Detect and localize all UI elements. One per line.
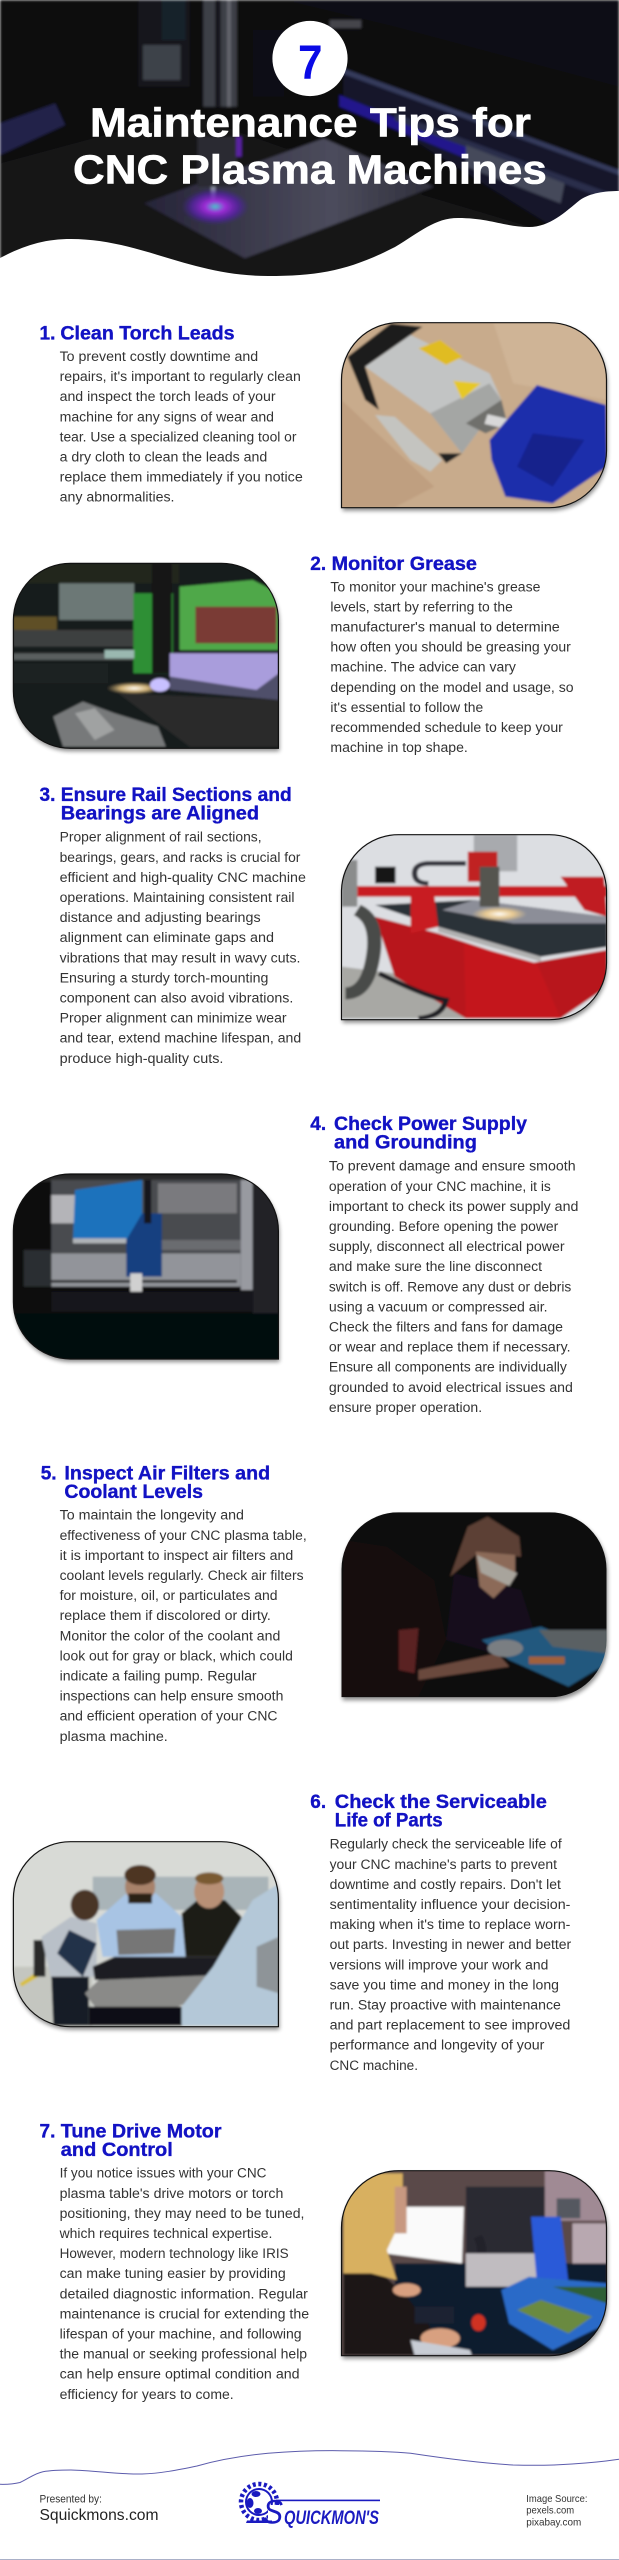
body text 4: To prevent damage and ensure smooth — [329, 1159, 576, 1174]
body text 3 — [60, 830, 306, 1066]
heading 1: 1. — [40, 323, 55, 344]
body text 6: versions will improve your work and — [330, 1957, 548, 1972]
body text 3: Proper alignment can minimize wear — [60, 1011, 287, 1026]
body text 4: operation of your CNC machine, it is — [329, 1179, 551, 1194]
body text 4: using a vacuum or compressed air. — [329, 1299, 548, 1314]
body text 5: To maintain the longevity and — [60, 1508, 244, 1523]
heading 4: Check Power Supply — [334, 1114, 527, 1135]
body text 7: efficiency for years to come. — [60, 2387, 234, 2402]
photo: green gantry machine cutting — [8, 560, 284, 753]
body text 5: replace them if discolored or dirty. — [60, 1608, 271, 1623]
heading 4: and Grounding — [334, 1133, 477, 1154]
heading 5: 5. — [41, 1463, 57, 1484]
photo: three engineers at a laptop — [8, 1838, 284, 2032]
body text 4: ensure proper operation. — [329, 1400, 482, 1415]
body text 4: or wear and replace them if necessary. — [329, 1340, 570, 1355]
logo: Squickmon's: QUICKMON'S — [284, 2508, 379, 2529]
presented by — [40, 2494, 158, 2524]
heading 6: Check the Serviceable — [335, 1792, 547, 1813]
heading 3: Bearings are Aligned — [61, 804, 259, 825]
body text 2 — [330, 579, 574, 755]
body text 2: levels, start by referring to the — [330, 599, 513, 614]
photo: torch head and blue glove — [332, 317, 616, 517]
body text 7: can help ensure optimal condition and — [60, 2367, 300, 2382]
body text 5: for moisture, oil, or particulates and — [60, 1588, 277, 1603]
panel: tip 1 clean torch leads — [40, 317, 616, 517]
photo: red plasma table — [336, 830, 612, 1023]
body text 6: Regularly check the serviceable life of — [330, 1837, 562, 1852]
body text 4: important to check its power supply and — [329, 1199, 578, 1214]
body text 7: If you notice issues with your CNC — [60, 2166, 267, 2181]
body text 7: However, modern technology like IRIS — [60, 2246, 289, 2261]
body text 5: coolant levels regularly. Check air filters — [60, 1568, 304, 1583]
body text 6: out parts. Investing in newer and better — [330, 1937, 572, 1952]
heading 6: Life of Parts — [335, 1811, 443, 1832]
body text 6 — [330, 1837, 572, 2073]
panel: tip 7 drive motor and control — [40, 2121, 612, 2402]
panel: tip 3 rail sections and bearings — [40, 785, 612, 1066]
body text 2: it's essential to follow the — [330, 700, 483, 715]
heading 6: 6. — [310, 1792, 326, 1813]
body text 3: produce high-quality cuts. — [60, 1051, 223, 1066]
body text 4: and make sure the line disconnect — [329, 1259, 542, 1274]
body text 3: bearings, gears, and racks is crucial for — [60, 850, 301, 865]
heading 2: Monitor Grease — [332, 554, 477, 575]
title: Maintenance Tips for — [90, 100, 531, 146]
body text 4: grounded to avoid electrical issues and — [329, 1380, 573, 1395]
body text 5: effectiveness of your CNC plasma table, — [60, 1528, 307, 1543]
body text 7: maintenance is crucial for extending the — [60, 2306, 309, 2321]
body text 7: can make tuning easier by providing — [60, 2266, 286, 2281]
body text 3: alignment can eliminate gaps and — [60, 930, 274, 945]
footer — [0, 2451, 619, 2560]
body text 5: indicate a failing pump. Regular — [60, 1668, 257, 1684]
body text 1: machine for any signs of wear and — [60, 409, 274, 424]
panel: tip 6 serviceable life of parts — [8, 1792, 572, 2073]
heading 4 — [310, 1114, 527, 1154]
heading 4: 4. — [310, 1114, 326, 1135]
body text 5 — [60, 1508, 307, 1744]
body text 4 — [329, 1159, 578, 1415]
body text 4: Check the filters and fans for damage — [329, 1320, 563, 1334]
body text 5: and efficient operation of your CNC — [60, 1709, 278, 1724]
panel: tip 2 monitor grease — [8, 554, 574, 755]
body text 1: To prevent costly downtime and — [60, 349, 258, 364]
image source: Image Source: — [526, 2493, 588, 2505]
heading 3 — [40, 785, 292, 825]
body text 1: any abnormalities. — [60, 490, 174, 505]
body text 6: CNC machine. — [330, 2058, 418, 2073]
body text 6: and part replacement to see improved — [330, 2018, 570, 2033]
body text 3: component can also avoid vibrations. — [60, 990, 293, 1006]
body text 6: save you time and money in the long — [330, 1977, 559, 1992]
body text 7: plasma table's drive motors or torch — [60, 2186, 283, 2201]
body text 7: the manual or seeking professional help — [60, 2347, 307, 2362]
body text 7: detailed diagnostic information. Regular — [60, 2286, 308, 2301]
heading 5 — [41, 1463, 270, 1503]
body text 1: tear. Use a specialized cleaning tool or — [60, 429, 297, 444]
body text 2: depending on the model and usage, so — [330, 680, 574, 695]
header photo: plasma machine — [0, 0, 619, 300]
body text 2: recommended schedule to keep your — [330, 720, 563, 735]
body text 4: grounding. Before opening the power — [329, 1219, 559, 1234]
photo: technician with goggles — [336, 1508, 612, 1702]
body text 1 — [60, 349, 303, 505]
body text 7 — [59, 2166, 309, 2402]
panel: tip 4 power supply and grounding — [8, 1114, 578, 1415]
body text 2: manufacturer's manual to determine — [330, 620, 560, 634]
badge: number 7 — [272, 21, 348, 96]
image source: pexels.com — [526, 2505, 574, 2517]
image source: pixabay.com — [526, 2516, 582, 2528]
body text 4: supply, disconnect all electrical power — [329, 1239, 565, 1254]
body text 3: vibrations that may result in wavy cuts. — [60, 950, 300, 965]
body text 6: making when it's time to replace worn- — [330, 1917, 570, 1932]
heading 2: 2. — [310, 554, 326, 575]
image source — [526, 2493, 588, 2528]
panel: tip 5 air filters and coolant — [41, 1463, 612, 1744]
body text 2: how often you should be greasing your — [330, 640, 571, 655]
heading 3: Ensure Rail Sections and — [61, 785, 292, 806]
body text 3: operations. Maintaining consistent rail — [60, 890, 295, 905]
title — [73, 100, 547, 193]
presented by: Squickmons.com — [40, 2507, 158, 2524]
body text 1: replace them immediately if you notice — [60, 470, 303, 485]
heading 7 — [40, 2121, 222, 2161]
body text 6: run. Stay proactive with maintenance — [330, 1998, 561, 2012]
body text 7: lifespan of your machine, and following — [60, 2326, 302, 2342]
body text 3: and tear, extend machine lifespan, and — [60, 1031, 301, 1046]
body text 6: sentimentality influence your decision- — [330, 1897, 570, 1912]
heading 7: and Control — [61, 2140, 173, 2161]
body text 5: inspections can help ensure smooth — [60, 1689, 283, 1704]
body text 3: efficient and high-quality CNC machine — [60, 870, 306, 885]
heading 3: 3. — [40, 785, 55, 806]
body text 7: positioning, they may need to be tuned, — [60, 2206, 304, 2221]
body text 4: Ensure all components are individually — [329, 1360, 567, 1375]
body text 5: it is important to inspect air filters and — [60, 1548, 293, 1563]
heading 5: Inspect Air Filters and — [64, 1463, 270, 1484]
wave divider — [0, 191, 619, 310]
body text 6: performance and longevity of your — [330, 2038, 545, 2053]
badge: number 7: 7 — [298, 37, 322, 90]
heading 6 — [310, 1792, 547, 1832]
heading 7: 7. — [40, 2121, 55, 2142]
body text 2: machine in top shape. — [330, 740, 468, 755]
header banner — [0, 0, 619, 310]
body text 2: machine. The advice can vary — [330, 660, 516, 675]
body text 7: which requires technical expertise. — [59, 2226, 272, 2241]
body text 3: Proper alignment of rail sections, — [60, 830, 262, 845]
photo: operator at blue CNC machine — [336, 2167, 612, 2360]
body text 1: and inspect the torch leads of your — [60, 389, 276, 404]
body text 3: distance and adjusting bearings — [60, 910, 261, 925]
body text 5: look out for gray or black, which could — [60, 1648, 293, 1663]
presented by: Presented by: — [40, 2494, 102, 2506]
body text 6: your CNC machine's parts to prevent — [330, 1857, 557, 1872]
body text 1: a dry cloth to clean the leads and — [60, 450, 267, 464]
body text 2: To monitor your machine's grease — [330, 579, 540, 594]
body text 5: Monitor the color of the coolant and — [60, 1628, 280, 1643]
title: CNC Plasma Machines — [73, 147, 547, 193]
heading 7: Tune Drive Motor — [61, 2121, 222, 2142]
body text 1: repairs, it's important to regularly clean — [60, 369, 301, 384]
heading 1: Clean Torch Leads — [60, 323, 235, 344]
body text 5: plasma machine. — [60, 1729, 168, 1744]
logo: Squickmon's: S — [263, 2494, 283, 2532]
body text 6: downtime and costly repairs. Don't let — [330, 1877, 561, 1892]
photo: blue laser cutter — [8, 1170, 284, 1363]
body text 3: Ensuring a sturdy torch-mounting — [60, 970, 268, 985]
heading 5: Coolant Levels — [64, 1482, 203, 1503]
body text 4: switch is off. Remove any dust or debris — [329, 1279, 572, 1294]
logo: Squickmon's — [241, 2484, 380, 2532]
